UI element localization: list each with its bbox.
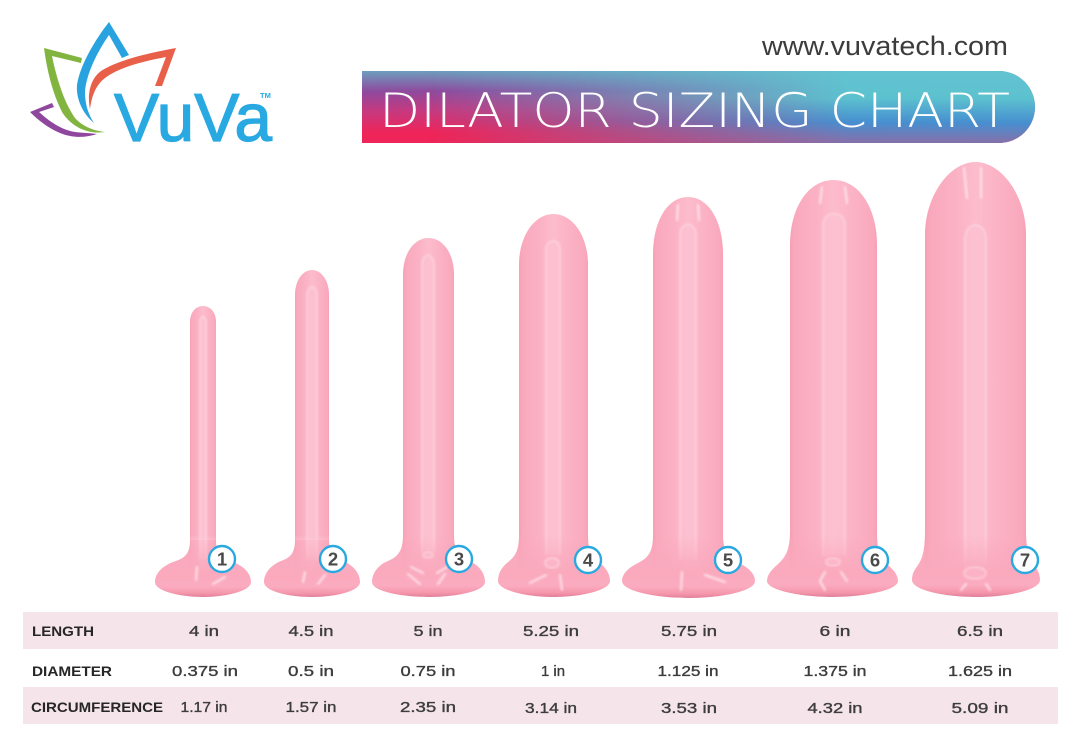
banner background — [362, 71, 1036, 144]
icon: blue petal — [77, 22, 129, 123]
badge 7: 7 — [1020, 550, 1030, 570]
row: diameter: 0.5 in — [288, 664, 334, 680]
icon: green petal — [44, 48, 105, 133]
badge 5: 5 — [723, 550, 733, 570]
number badges — [209, 546, 1038, 573]
trademark: TM — [260, 91, 271, 100]
title: DILATOR SIZING CHART — [379, 84, 1010, 139]
row: length: 6 in — [820, 624, 850, 640]
row: diameter: 0.75 in — [400, 664, 456, 680]
dilator 6 — [767, 180, 898, 597]
row: diameter: 1.375 in — [804, 664, 866, 680]
row: diameter: DIAMETER — [32, 663, 112, 679]
badge 3: 3 — [454, 548, 464, 570]
row: diameter: 1.125 in — [658, 664, 718, 680]
badge 4: 4 — [583, 550, 594, 570]
row: length: 4.5 in — [288, 624, 334, 640]
row: circumference: CIRCUMFERENCE — [31, 699, 163, 715]
row: length: 5.25 in — [523, 624, 579, 640]
dilator 3 — [372, 238, 485, 597]
row: circumference — [23, 687, 1058, 724]
badge 2 — [320, 546, 346, 572]
badge 1: 1 — [217, 548, 227, 570]
row: diameter: 1 in — [541, 664, 565, 680]
dilator 5 — [622, 197, 755, 598]
dilator 1 — [155, 306, 251, 597]
badge 3 — [446, 546, 472, 572]
row: circumference: 4.32 in — [808, 701, 862, 717]
icon: red petal — [89, 48, 176, 109]
logo: VuVa lotus — [30, 22, 272, 156]
badge 1 — [209, 546, 235, 572]
row: circumference: 5.09 in — [952, 701, 1008, 717]
row: circumference: 3.14 in — [525, 701, 577, 717]
row: length — [23, 612, 1058, 649]
dilator 4 — [498, 214, 610, 597]
title banner — [362, 71, 1036, 144]
row: circumference: 3.53 in — [661, 701, 717, 717]
row: length: 5.75 in — [661, 624, 717, 640]
row: circumference: 2.35 in — [400, 700, 456, 716]
badge 2: 2 — [328, 548, 338, 570]
row: length: LENGTH — [32, 623, 94, 639]
logo wordmark: VuVa — [114, 80, 272, 156]
badge 4 — [575, 547, 601, 573]
row: length: 4 in — [189, 624, 219, 640]
dilator 7 — [912, 162, 1040, 597]
badge 6 — [862, 547, 888, 573]
badge 5 — [715, 547, 741, 573]
badge 6: 6 — [870, 550, 880, 570]
dilator 2 — [264, 270, 360, 597]
row: circumference: 1.57 in — [286, 700, 336, 716]
website url: www.vuvatech.com — [761, 31, 1008, 61]
badge 7 — [1012, 547, 1038, 573]
icon: purple petal — [30, 103, 97, 137]
row: diameter: 0.375 in — [172, 664, 238, 680]
row: length: 6.5 in — [957, 624, 1003, 640]
row: circumference: 1.17 in — [180, 700, 228, 716]
dilators — [155, 162, 1040, 598]
row: diameter — [32, 663, 1012, 680]
sizing table — [23, 612, 1058, 724]
row: length: 5 in — [414, 624, 442, 640]
row: diameter: 1.625 in — [948, 664, 1012, 680]
